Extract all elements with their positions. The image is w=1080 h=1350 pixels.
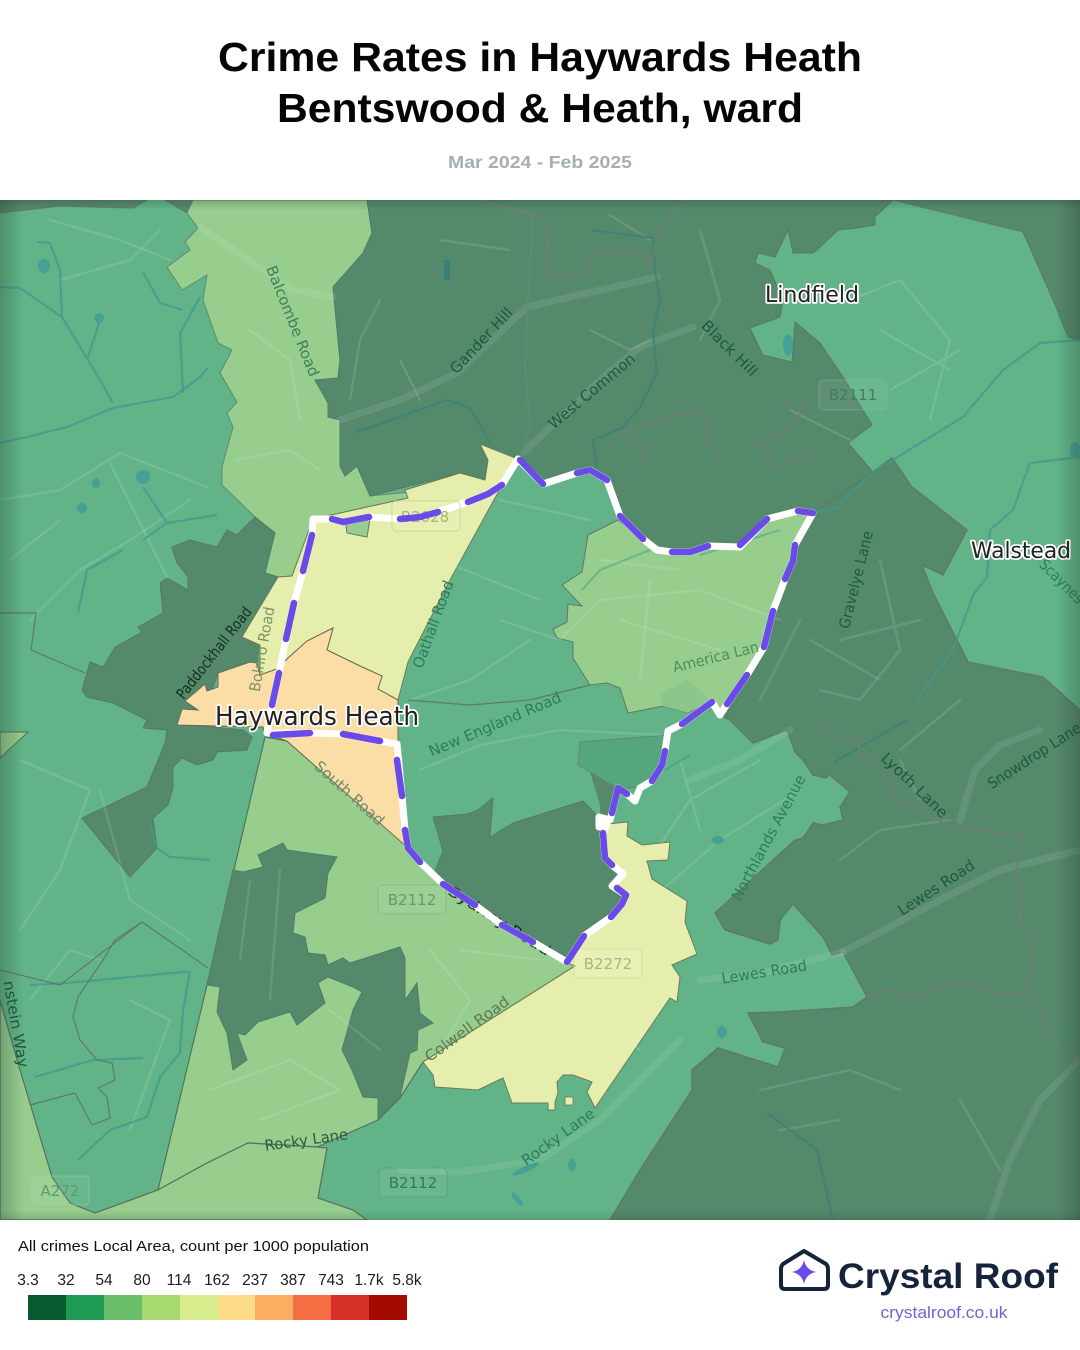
legend tick labels: 3.3: [17, 1272, 39, 1289]
title: [218, 34, 862, 131]
area: south light green: [158, 737, 585, 1190]
map labels: Colwell Road: [421, 992, 513, 1066]
legend colour scale: [28, 1295, 407, 1320]
road badge: B2112 south: B2112: [389, 1174, 437, 1192]
icon: house with star: [781, 1251, 828, 1289]
legend tick labels: 80: [133, 1272, 151, 1289]
map labels: [0, 263, 1080, 1170]
legend tick labels: 32: [57, 1272, 75, 1289]
road badge: B2112 south: [379, 1168, 447, 1197]
map labels: Rocky Lane: [518, 1104, 598, 1170]
road badge: A272: [31, 1176, 89, 1205]
map labels: South Road: [311, 757, 388, 829]
area: top central dark green: [315, 200, 893, 552]
map labels: Paddockhall Road: [172, 603, 256, 703]
road badge: B2111: [819, 380, 887, 410]
area: top-right corner dark green: [893, 200, 1080, 340]
ward boundary: purple dashes: [272, 460, 813, 962]
map labels: nstein Way: [0, 979, 32, 1069]
legend tick labels: 387: [280, 1272, 306, 1289]
road badge: B2272: [574, 949, 642, 978]
legend: [17, 1238, 422, 1320]
logo url: crystalroof.co.uk: [880, 1304, 1008, 1322]
legend tick labels: 114: [167, 1272, 192, 1289]
legend title: All crimes Local Area, count per 1000 population: [18, 1238, 369, 1255]
road badge: A272: A272: [41, 1182, 79, 1200]
area: small west light patch: [0, 732, 28, 758]
map label: Sydney Road, partly hidden by the route: Sydney Road: [445, 884, 553, 960]
boundary lines: [0, 613, 590, 1125]
place label: Lindfield: Lindfield: [765, 283, 859, 308]
map labels: Northlands Avenue: [728, 772, 809, 904]
area: central dark green: [433, 798, 627, 963]
road badge: B2272: B2272: [584, 955, 632, 973]
map edge vignette: [0, 200, 1080, 1220]
road badge: B2112 north: B2112: [388, 891, 436, 909]
legend tick labels: 5.8k: [392, 1272, 422, 1289]
area: north light green: [167, 200, 410, 577]
map labels: Lyoth Lane: [877, 749, 952, 822]
map labels: Gander Hill: [446, 304, 517, 377]
place label: Haywards Heath: Haywards Heath: [215, 702, 419, 732]
map labels: Oathall Road: [409, 578, 457, 671]
logo wordmark: Crystal Roof: [838, 1257, 1058, 1296]
rivers and ponds: [0, 230, 1080, 1220]
area: east and south-east dark green: [610, 458, 1080, 1220]
road badge: B2028: B2028: [401, 508, 449, 526]
map labels: New England Road: [426, 688, 564, 760]
legend tick labels: 162: [204, 1272, 230, 1289]
map panel: [0, 200, 1080, 1220]
map labels: Lewes Road: [894, 856, 978, 919]
area: south-west dark green: [207, 843, 433, 1120]
road badge: B2111: B2111: [829, 386, 877, 404]
area: Haywards Heath peach: [177, 628, 408, 848]
area: America Lane light green: [553, 511, 813, 715]
area: small pale square: [565, 1097, 573, 1105]
title: Crime Rates in Haywards Heath: [218, 34, 862, 80]
legend tick labels: 1.7k: [354, 1272, 384, 1289]
area: top-left dark strip: [0, 200, 192, 214]
area: Colwell pale yellow: [423, 822, 697, 1110]
legend tick labels: 237: [242, 1272, 268, 1289]
map labels: Rocky Lane: [263, 1125, 349, 1155]
area: small light green square: [345, 519, 370, 537]
road badge: B2028: [392, 501, 460, 531]
map labels: Gravelye Lane: [835, 529, 877, 630]
map labels: Balcombe Road: [262, 263, 323, 379]
map labels: America Lan: [671, 638, 761, 677]
legend tick labels: [17, 1272, 422, 1289]
map labels: West Common: [545, 350, 639, 433]
subtitle: date range: Mar 2024 - Feb 2025: [448, 152, 632, 172]
place label: Walstead: Walstead: [971, 539, 1071, 564]
area: small dark green: [590, 772, 614, 816]
area: river strip green: [578, 735, 667, 788]
area: Oathall pale yellow: [242, 444, 518, 700]
area: west dark green: [82, 517, 278, 877]
map labels: Lewes Road: [720, 956, 808, 988]
ward boundary: white line: [267, 459, 813, 962]
map labels: Black Hill: [698, 317, 761, 380]
legend tick labels: 743: [318, 1272, 344, 1289]
map base: mid green areas: [0, 200, 1080, 1220]
legend tick labels: 54: [95, 1272, 113, 1289]
map labels: Bolnro Road: [246, 605, 278, 693]
logo: Crystal Roof: [781, 1251, 1058, 1322]
title: Bentswood & Heath, ward: [277, 85, 803, 131]
road badge: B2112 north: [378, 885, 446, 914]
area: bottom-left light green: [0, 1000, 367, 1220]
road network: [200, 227, 1080, 1220]
area: America Lane park: [660, 679, 710, 713]
